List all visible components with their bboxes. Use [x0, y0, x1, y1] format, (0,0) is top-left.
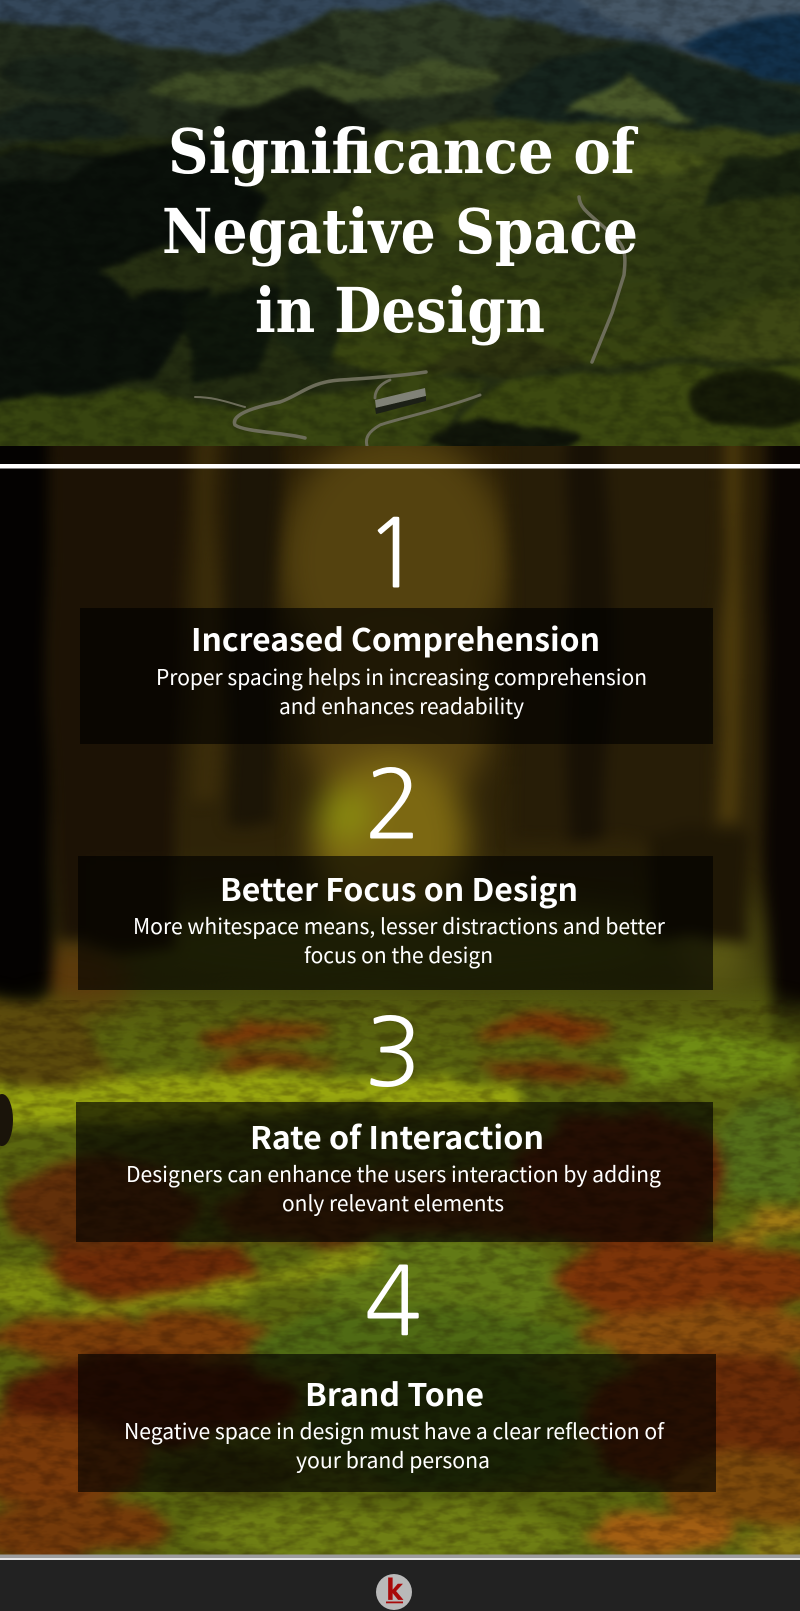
text: item 2 description: More whitespace means, lesser distractions and better: [133, 910, 666, 941]
text: item 1 description: Proper spacing helps in increasing comprehension: [156, 661, 647, 692]
text: item 1 description: and enhances readability: [279, 690, 524, 721]
heading: Increased Comprehension: Increased Comprehension: [191, 615, 600, 660]
number 2: 2: [364, 757, 422, 852]
title: [162, 115, 638, 347]
icon: k logo: [376, 1573, 412, 1610]
text: item 4 description: your brand persona: [296, 1444, 490, 1475]
title: Significance of: [168, 115, 638, 188]
heading: Better Focus on Design: Better Focus on Design: [220, 865, 578, 910]
icon: k logo: k: [386, 1573, 404, 1607]
text: item 4 description: Negative space in design must have a clear reflection of: [124, 1415, 665, 1446]
panel: item 1: [80, 608, 713, 744]
forest photo background: [0, 400, 800, 1611]
title: in Design: [255, 274, 545, 347]
item 2: [78, 757, 713, 990]
text: item 2 description: [133, 910, 666, 970]
panel: item 2: [78, 856, 713, 990]
number 4: 4: [364, 1254, 422, 1349]
divider line: [0, 464, 800, 468]
item 1: [80, 506, 713, 744]
hero photo: mountain landscape: [0, 0, 800, 446]
number 3: 3: [364, 1005, 422, 1100]
rock at left edge: [0, 1094, 13, 1146]
text: item 4 description: [124, 1415, 665, 1475]
text: item 3 description: only relevant elements: [282, 1187, 504, 1218]
number 1: 1: [364, 506, 422, 601]
icon: mountain hut: [375, 388, 426, 414]
texture: leaf grain: [0, 1000, 800, 1555]
item 3: [76, 1005, 713, 1242]
panel: item 4: [78, 1354, 716, 1492]
text: item 3 description: Designers can enhance the users interaction by adding: [126, 1158, 661, 1189]
icon: mountain roads: [195, 197, 625, 446]
text: item 3 description: [126, 1158, 661, 1218]
panel: item 3: [76, 1102, 713, 1242]
item 4: [78, 1254, 716, 1492]
text: item 2 description: focus on the design: [304, 939, 493, 970]
texture: hero grain: [0, 0, 800, 446]
title: Negative Space: [162, 195, 638, 268]
lower grass and leaves: [0, 985, 800, 1611]
footer bar: [0, 1554, 800, 1611]
heading: Rate of Interaction: Rate of Interaction: [250, 1113, 544, 1158]
heading: Brand Tone: Brand Tone: [305, 1370, 484, 1415]
text: item 1 description: [156, 661, 647, 721]
